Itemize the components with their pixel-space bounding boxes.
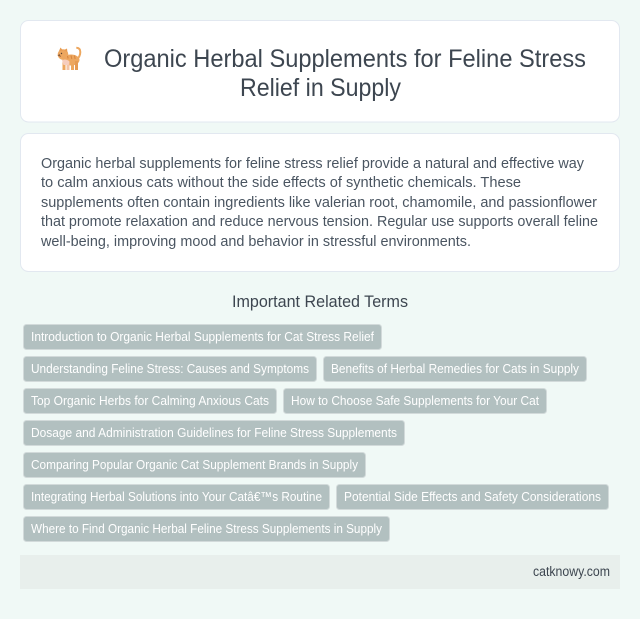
chip: choosing safe supplements <box>284 388 546 414</box>
title text: Organic Herbal Supplements for Feline Stress <box>104 46 586 73</box>
chip: top organic herbs <box>24 388 276 414</box>
summary paragraph: that promote relaxation and reduce nervous tension. Regular use supports overall feline <box>41 213 598 230</box>
chip: side effects: Potential Side Effects and Safety Considerations <box>344 489 601 504</box>
chip: introduction <box>24 324 382 350</box>
chip: dosage guidelines <box>24 420 404 446</box>
chip: where to find: Where to Find Organic Herbal Feline Stress Supplements in Supply <box>31 521 383 536</box>
chip: introduction: Introduction to Organic Herbal Supplements for Cat Stress Relief <box>31 329 374 344</box>
summary paragraph: supplements often contain ingredients like valerian root, chamomile, and passionflower <box>41 194 597 211</box>
chip: benefits of herbal remedies <box>324 356 586 382</box>
chip: understanding feline stress: Understanding Feline Stress: Causes and Symptoms <box>31 361 309 376</box>
title text <box>104 46 586 102</box>
panel: related term chips <box>24 324 608 542</box>
panel: title card <box>20 20 620 122</box>
chip: where to find <box>24 516 390 542</box>
icon: cat <box>58 48 80 70</box>
chip: side effects <box>336 484 608 510</box>
summary paragraph: well-being, improving mood and behavior in stressful environments. <box>40 233 471 250</box>
chip: integrating herbal solutions <box>24 484 330 510</box>
chip: dosage guidelines: Dosage and Administration Guidelines for Feline Stress Supplements <box>31 425 397 440</box>
chip: choosing safe supplements: How to Choose Safe Supplements for Your Cat <box>291 393 539 408</box>
chip: comparing brands: Comparing Popular Organic Cat Supplement Brands in Supply <box>31 457 359 472</box>
title text: Relief in Supply <box>240 75 402 102</box>
chip: understanding feline stress <box>24 356 316 382</box>
heading: important related terms: Important Related Terms <box>232 293 408 311</box>
summary paragraph: to calm anxious cats without the side effects of synthetic chemicals. These <box>41 174 521 191</box>
chip: top organic herbs: Top Organic Herbs for Calming Anxious Cats <box>31 393 269 408</box>
chip: benefits of herbal remedies: Benefits of Herbal Remedies for Cats in Supply <box>331 361 580 376</box>
footer site name: catknowy.com <box>533 564 610 579</box>
chip: integrating herbal solutions: Integrating Herbal Solutions into Your Catâ€™s Routine <box>31 489 322 504</box>
chip: comparing brands <box>24 452 366 478</box>
summary paragraph: Organic herbal supplements for feline stress relief provide a natural and effective way <box>41 155 584 172</box>
footer <box>20 555 620 589</box>
summary paragraph <box>40 155 598 250</box>
panel: summary card <box>20 134 620 272</box>
